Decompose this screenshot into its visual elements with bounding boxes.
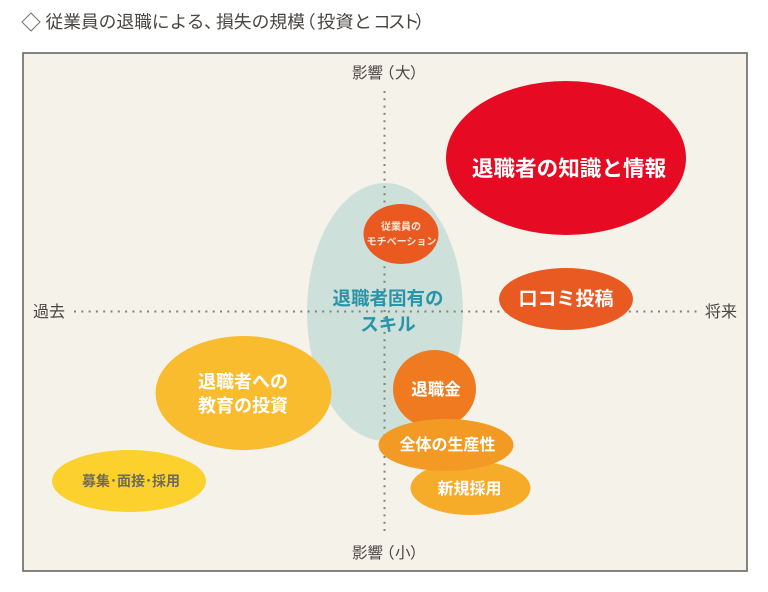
label: skills: スキル	[360, 314, 416, 335]
bubble: severance: 退職金	[411, 379, 461, 399]
axis: vertical dotted	[384, 91, 386, 534]
bubble: new hires: 新規採用	[437, 480, 502, 498]
bubble: training investment	[156, 336, 332, 450]
title text: コ	[373, 12, 391, 32]
bubble: knowledge and information	[446, 81, 686, 235]
bubble: severance	[393, 350, 476, 428]
axis label: impact large: 大	[395, 64, 411, 82]
axis: horizontal dotted	[74, 310, 698, 312]
bubble: new hires	[410, 461, 530, 515]
axis label: past: 過去	[33, 303, 65, 321]
bubble: recruiting: 募集･面接･採用	[82, 473, 180, 489]
axis label: impact small: （	[379, 545, 395, 562]
title	[22, 12, 433, 32]
icon: diamond	[22, 13, 40, 31]
bubble: reviews	[499, 268, 633, 330]
bubble: reviews: 口コミ投稿	[518, 288, 614, 310]
bubble: motivation	[364, 204, 438, 264]
label: skills: 退職者固有の	[332, 288, 444, 309]
title text: 従業員の退職による	[46, 12, 204, 32]
axis label: impact large: ）	[410, 65, 426, 82]
bubble: motivation: モチベーション	[367, 236, 436, 248]
axis label: impact large: 影響	[352, 64, 383, 82]
axis label: impact small: 影響	[352, 544, 383, 562]
axis label: impact small: 小	[395, 544, 411, 562]
title text: 、	[204, 12, 222, 32]
ellipse: skills	[307, 183, 463, 441]
bubble: knowledge and information: 退職者の知識と情報	[472, 156, 667, 181]
bubble: training investment: 退職者への	[198, 372, 288, 392]
bubble: productivity	[378, 419, 514, 471]
title text: ト	[402, 12, 420, 32]
axis label: impact small: ）	[410, 545, 426, 562]
label: skills	[332, 288, 444, 335]
bubble: training investment: 教育の投資	[198, 396, 288, 416]
title text: 損失の規模	[216, 12, 305, 32]
bubble: productivity: 全体の生産性	[399, 435, 496, 454]
bubble: recruiting	[52, 450, 206, 512]
axis label: future: 将来	[705, 303, 737, 321]
axis label: impact large: （	[379, 65, 395, 82]
title text: （	[298, 12, 316, 32]
bubble: motivation: 従業員の	[381, 220, 421, 233]
title text: ）	[415, 12, 433, 32]
title text: ス	[388, 12, 406, 32]
title text: 投資と	[317, 12, 372, 32]
